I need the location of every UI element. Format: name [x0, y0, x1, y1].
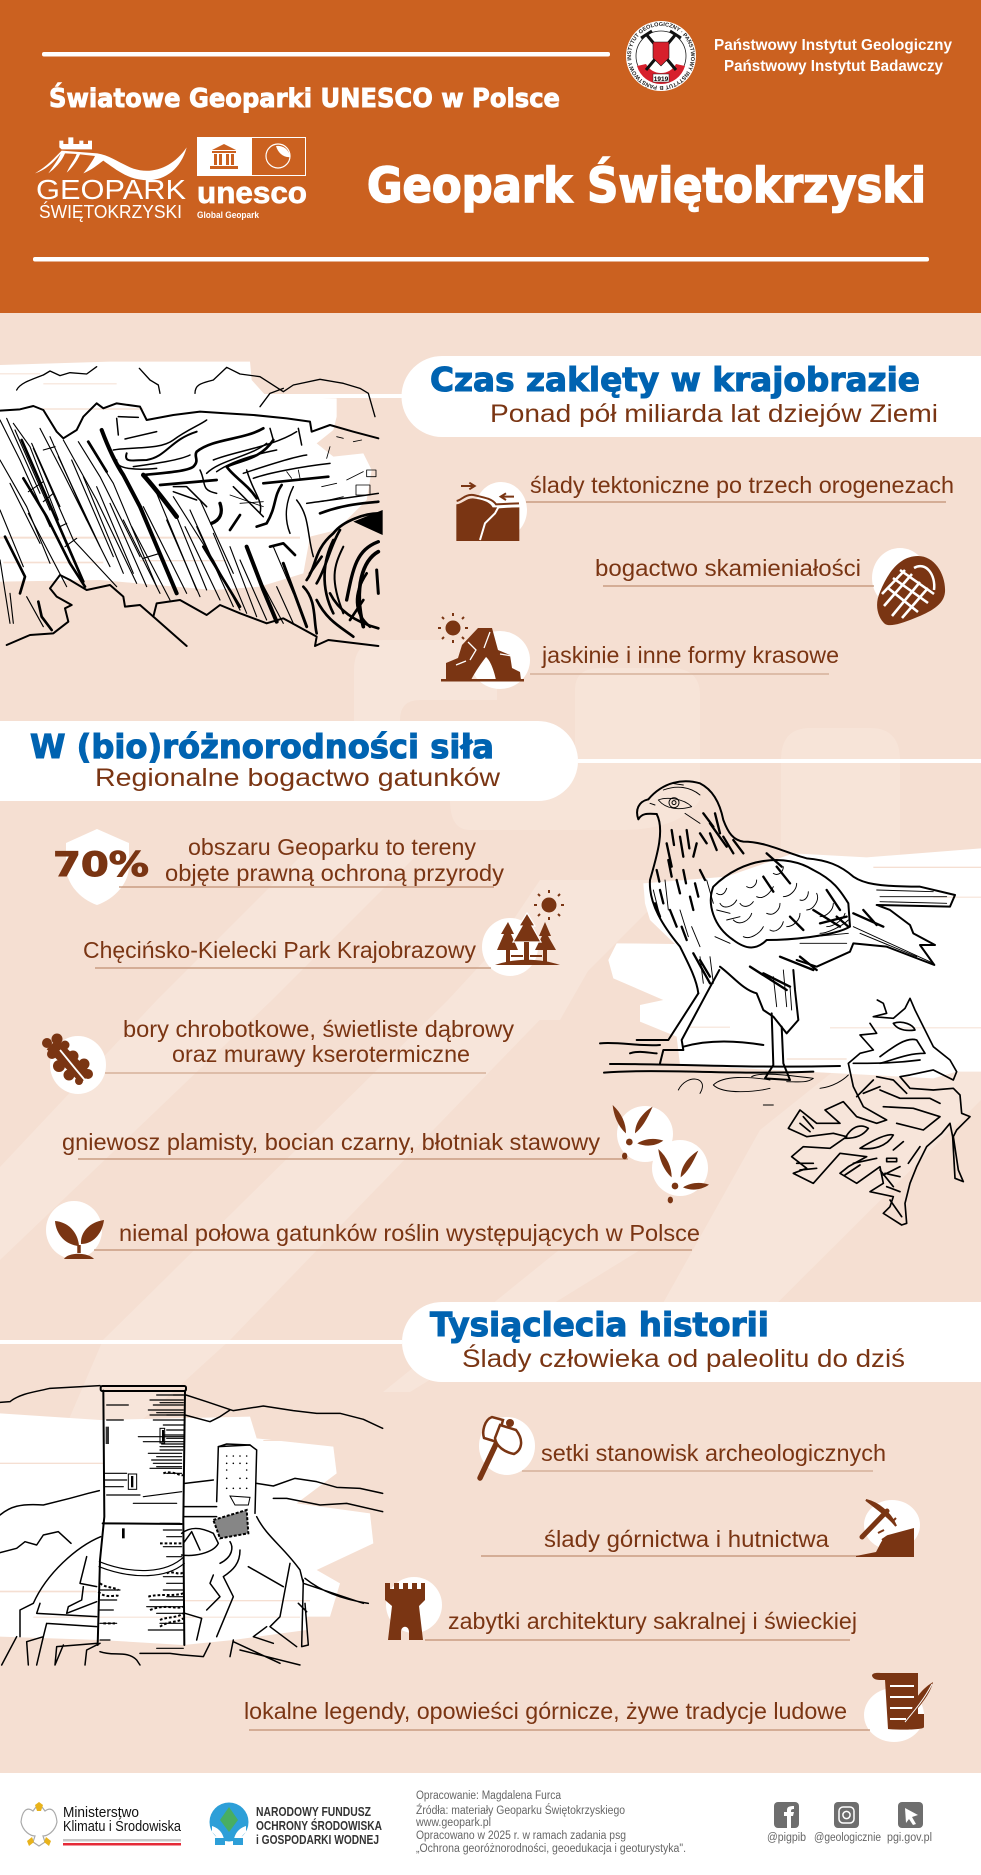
- item: legends and traditions: lokalne legendy, opowieści górnicze, żywe tradycje ludowe: [244, 1698, 847, 1724]
- credits: Opracowanie: Magdalena Furca: [416, 1790, 562, 1802]
- section heading: W (bio)różnorodności: [0, 721, 578, 801]
- logo: Ministry of Climate and Environment: Klimatu i Środowiska: [63, 1817, 182, 1835]
- social: instagram: [834, 1802, 859, 1828]
- item: birds: [62, 1105, 709, 1203]
- icon: scroll and quill: [872, 1673, 933, 1730]
- item: landscape park: [83, 890, 564, 976]
- section heading: Tysiąclecia historii: [402, 1302, 981, 1382]
- icon: trees with sun: [495, 890, 564, 965]
- institute name: Państwowy Instytut Badawczy: [724, 58, 943, 75]
- item: tectonic traces: ślady tektoniczne po trzech orogenezach: [530, 472, 954, 498]
- item: mining: [481, 1500, 920, 1557]
- logo: NFOŚiGW: NARODOWY FUNDUSZ: [256, 1805, 371, 1819]
- section heading: Czas zaklęty: Ponad pół miliarda lat dziejów Ziemi: [490, 400, 938, 428]
- icon: tectonic fold: [456, 483, 519, 541]
- credits: Źródła: materiały Geoparku Świętokrzyskiego: [416, 1804, 625, 1817]
- footer: [0, 1773, 981, 1875]
- logo: Państwowy Instytut Geologiczny badge: 1919: [654, 76, 669, 83]
- item: forests and grasslands: [42, 1016, 515, 1094]
- item: plants: [46, 1201, 700, 1259]
- item: monuments: zabytki architektury sakralnej i świeckiej: [448, 1608, 857, 1634]
- icon: sprout: [55, 1220, 104, 1259]
- section heading: Tysiąclecia historii: Tysiąclecia historii: [430, 1305, 769, 1344]
- logo: UNESCO Global Geopark: [197, 137, 307, 220]
- icon: castle tower: [385, 1583, 425, 1640]
- icon: trilobite: [877, 556, 945, 625]
- item: caves: [438, 613, 839, 689]
- subtitle: Światowe Geoparki: Światowe Geoparki UNESCO w Polsce: [49, 82, 560, 114]
- section heading: Czas zaklęty: [402, 356, 981, 437]
- social labels: @geologicznie: [814, 1832, 881, 1844]
- icon: pickaxe and rock: [856, 1500, 914, 1557]
- logo: Ministry of Climate and Environment: Ministerstwo: [63, 1805, 139, 1821]
- item: archaeological sites: setki stanowisk archeologicznych: [541, 1440, 886, 1466]
- item: tectonic traces: [456, 472, 954, 541]
- logo: UNESCO Global Geopark: Global Geopark: [197, 210, 260, 220]
- section heading: W (bio)różnorodności: W (bio)różnorodności siła: [30, 727, 494, 766]
- item: monuments: [385, 1577, 857, 1640]
- social labels: @pigpib: [767, 1832, 806, 1844]
- logo: Geopark Świętokrzyski: [35, 137, 187, 222]
- icon: stone axe: [480, 1417, 521, 1478]
- illustration: castle tower: [0, 1386, 383, 1665]
- header band: [0, 0, 981, 313]
- item: landscape park: Chęcińsko-Kielecki Park Krajobrazowy: [83, 937, 476, 963]
- item: forests and grasslands: bory chrobotkowe, świetliste dąbrowy: [123, 1016, 515, 1042]
- credits: www.geopark.pl: [415, 1817, 491, 1829]
- section heading: Tysiąclecia historii: Ślady człowieka od paleolitu do dziś: [462, 1343, 905, 1373]
- social labels: pgi.gov.pl: [887, 1832, 932, 1844]
- logo: NFOŚiGW: i GOSPODARKI WODNEJ: [256, 1833, 379, 1847]
- item: birds: gniewosz plamisty, bocian czarny, błotniak stawowy: [62, 1129, 601, 1155]
- credits: Opracowano w 2025 r. w ramach zadania psg: [416, 1830, 626, 1842]
- item: 70 percent protected: obszaru Geoparku to tereny: [188, 834, 477, 860]
- item: 70 percent protected: [53, 829, 505, 905]
- icon: oak leaf: [42, 1034, 93, 1087]
- institute name: Państwowy Instytut Geologiczny: [714, 37, 952, 54]
- illustration: folded rock strata: [0, 362, 383, 646]
- icon: bird tracks: [613, 1105, 709, 1203]
- social: facebook: [774, 1802, 799, 1828]
- item: legends and traditions: [244, 1673, 933, 1742]
- item: forests and grasslands: oraz murawy kserotermiczne: [172, 1041, 470, 1067]
- item: fossils: [595, 548, 945, 625]
- logo: Geopark Świętokrzyski: ŚWIĘTOKRZYSKI: [39, 201, 182, 222]
- item: mining: ślady górnictwa i hutnictwa: [544, 1526, 829, 1552]
- social: website: [898, 1802, 923, 1828]
- credits: „Ochrona georóżnorodności, geoedukacja i geoturystyka".: [416, 1843, 686, 1855]
- logo: Państwowy Instytut Geologiczny badge: [626, 21, 696, 91]
- section heading: W (bio)różnorodności: Regionalne bogactwo gatunków: [95, 764, 501, 792]
- logo: Geopark Świętokrzyski: GEOPARK: [36, 174, 186, 205]
- item: 70 percent protected: 70%: [53, 845, 149, 885]
- title: Geopark Świętokrzyski: Geopark Świętokrzyski: [367, 157, 926, 214]
- lichen: [788, 998, 970, 1225]
- logo: Ministry of Climate and Environment: [21, 1802, 182, 1846]
- logo: UNESCO Global Geopark: unesco: [197, 175, 307, 210]
- illustration: bird with lichen: [600, 781, 981, 1225]
- social labels: [767, 1832, 932, 1844]
- institute name: [714, 37, 952, 75]
- item: caves: jaskinie i inne formy krasowe: [541, 642, 839, 668]
- credits: [415, 1790, 686, 1855]
- item: fossils: bogactwo skamieniałości: [595, 555, 861, 581]
- item: archaeological sites: [479, 1417, 886, 1478]
- logo: NFOŚiGW: [210, 1802, 382, 1847]
- item: plants: niemal połowa gatunków roślin występujących w Polsce: [119, 1220, 700, 1246]
- logo: NFOŚiGW: OCHRONY ŚRODOWISKA: [256, 1818, 382, 1833]
- section heading: Czas zaklęty: Czas zaklęty w krajobrazie: [430, 360, 920, 399]
- icon: karst cave with sun: [438, 613, 524, 682]
- item: 70 percent protected: objęte prawną ochroną przyrody: [165, 860, 505, 886]
